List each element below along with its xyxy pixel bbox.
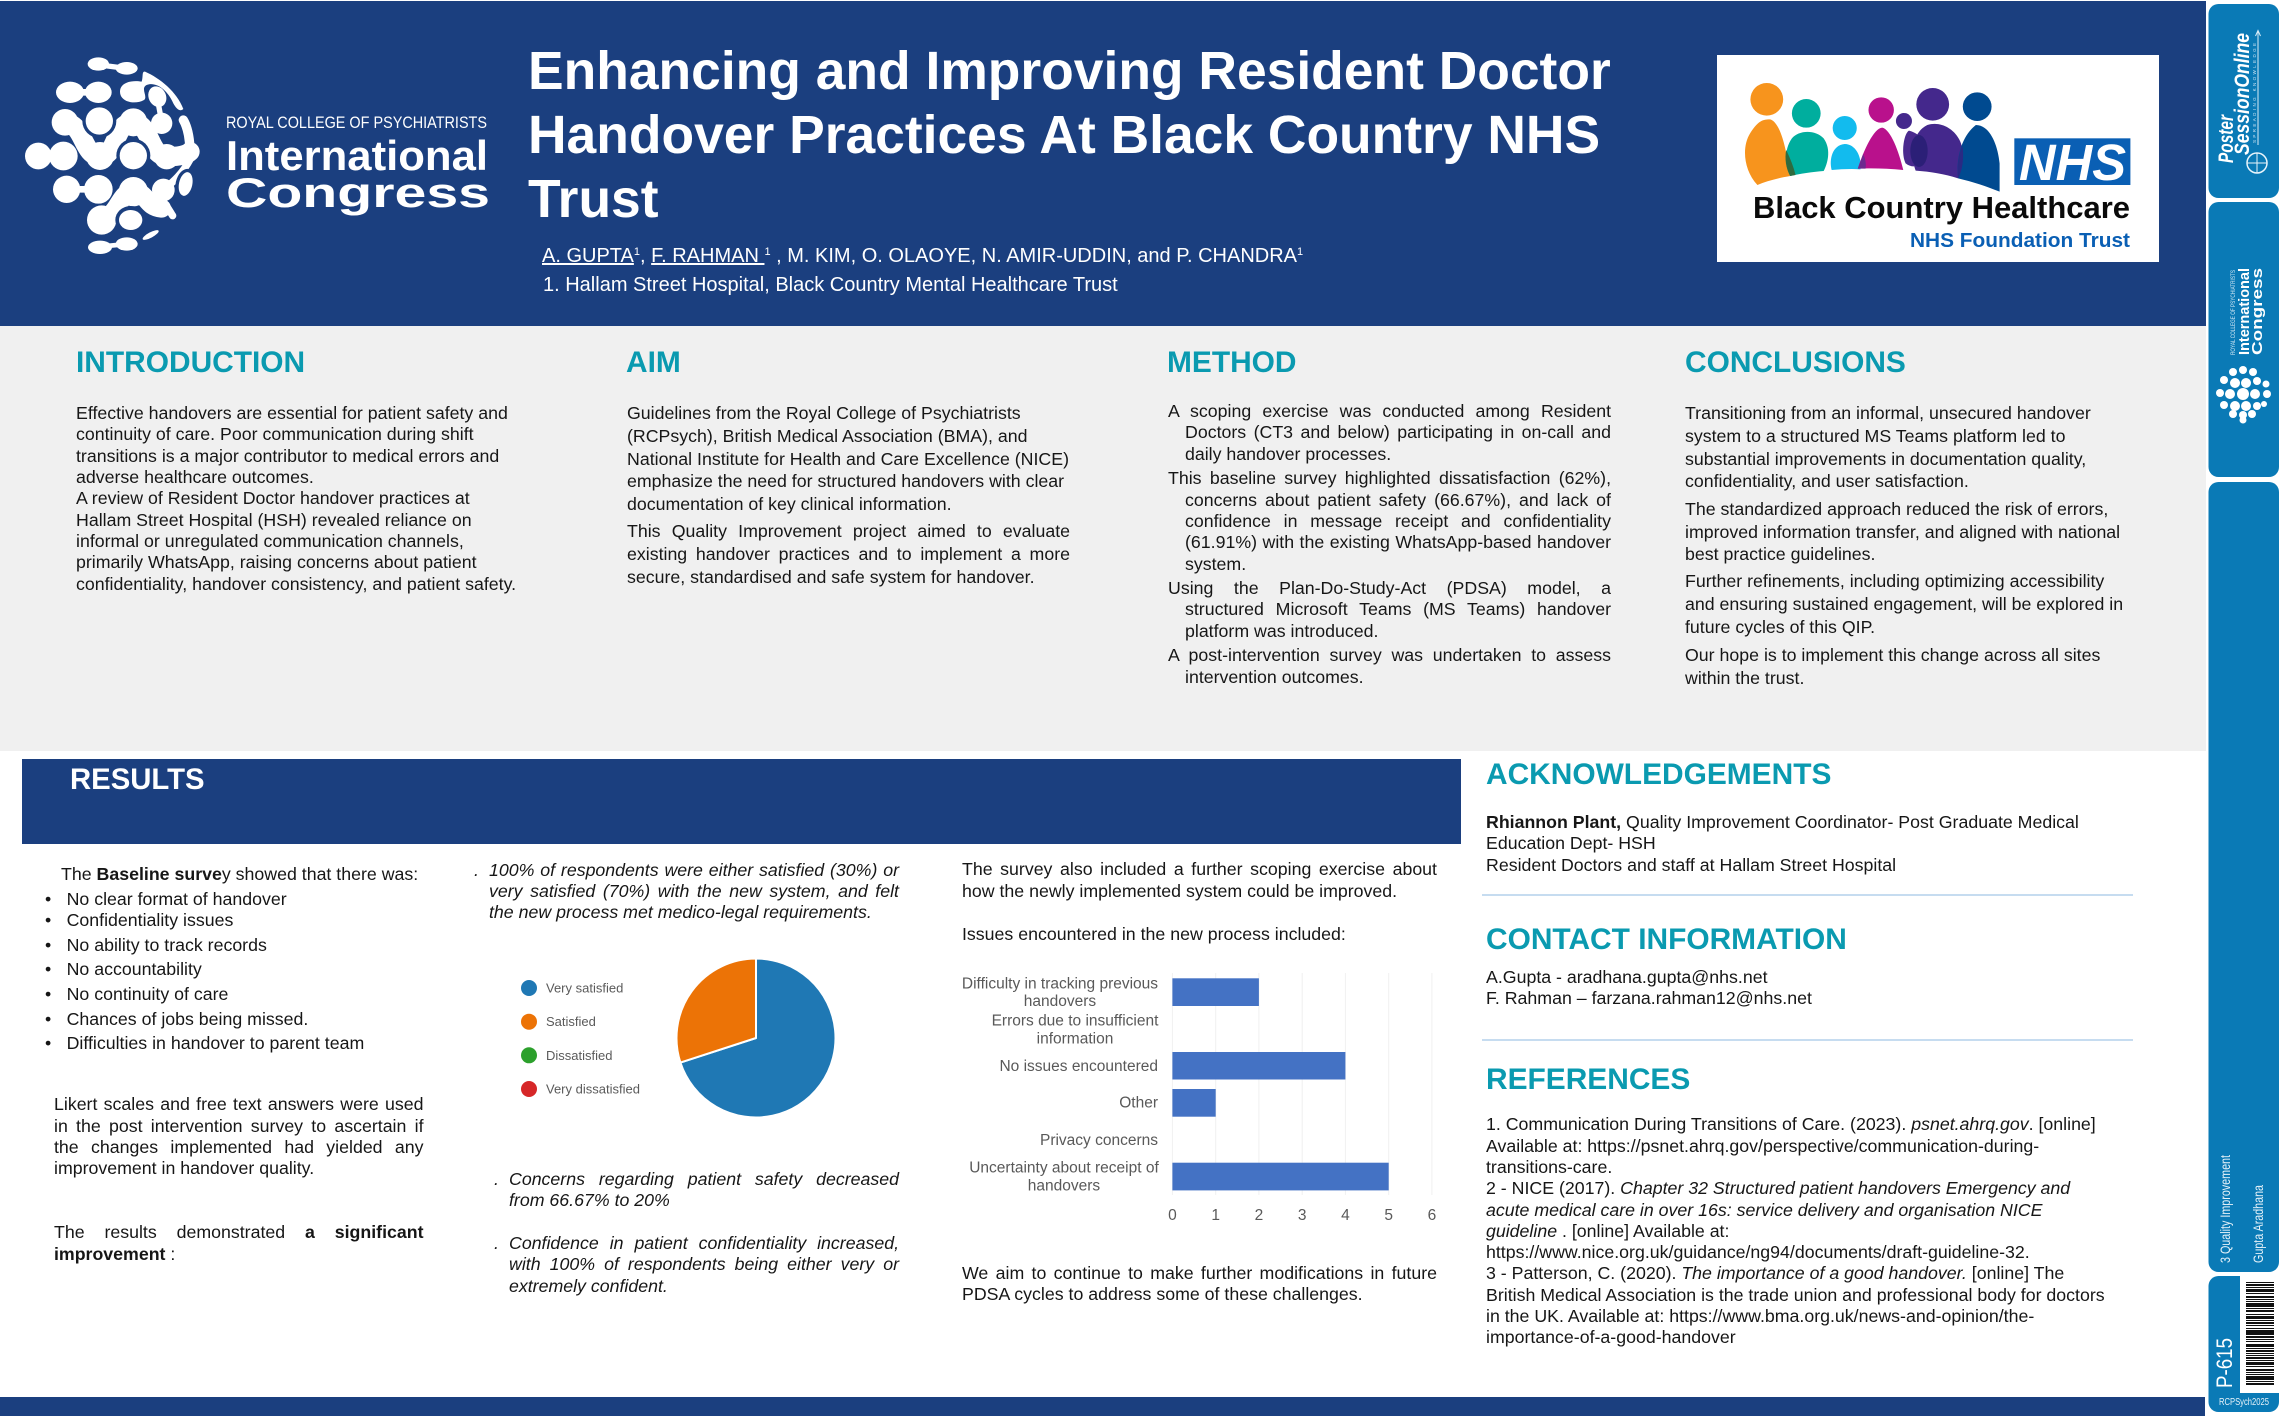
text: introduction: Hallam Street Hospital (HSH) revealed reliance on	[76, 510, 472, 530]
text: future cycles	[962, 1263, 1437, 1304]
poster title: Trust	[528, 170, 659, 228]
heading: results: RESULTS	[70, 763, 205, 796]
pie chart: satisfaction	[521, 960, 834, 1116]
text: conclusions: improved information transfer, and aligned with national	[1685, 522, 2120, 542]
pie slices	[676, 958, 835, 1118]
text: conclusions: Our hope is to implement this change across all sites	[1685, 645, 2100, 665]
list: baseline survey findings: •	[45, 984, 51, 1004]
header banner	[0, 1, 2206, 326]
list: baseline survey findings: •	[45, 910, 51, 930]
heading: acknowledgements: ACKNOWLEDGEMENTS	[1486, 758, 1831, 790]
list: baseline survey findings: •	[45, 1009, 51, 1029]
text: method: This baseline survey highlighted dissatisfaction (62%),	[1168, 468, 1611, 488]
tab: poster number and barcode	[2208, 1276, 2279, 1412]
text: method: confidence in message receipt and confidentiality	[1185, 511, 1611, 531]
tab: poster number and barcode: RCPSych2025	[2219, 1397, 2269, 1408]
tab: poster session online: Poster	[2215, 114, 2238, 163]
text: references: 3 - Patterson, C. (2020). The importance of a good handover. [online] The	[1486, 1263, 2064, 1283]
axis ticks: 3	[1298, 1207, 1307, 1224]
text: patient safety finding: Concerns regarding patient safety decreased	[509, 1169, 899, 1189]
category labels: Privacy concerns	[1040, 1132, 1158, 1149]
text: aim: existing handover practices and to implement a more	[627, 544, 1070, 564]
results banner	[22, 759, 1461, 844]
list: baseline survey findings: •	[45, 935, 51, 955]
text: conclusions: future cycles of this QIP.	[1685, 617, 1875, 637]
text: introduction	[76, 403, 516, 594]
pie legend: Very satisfied	[546, 980, 623, 996]
category labels: handovers	[1024, 993, 1096, 1010]
text: patient safety finding	[494, 1169, 900, 1210]
tab: international congress: International	[2236, 268, 2253, 355]
text: conclusions: The standardized approach reduced the risk of errors,	[1685, 499, 2108, 519]
heading: references: REFERENCES	[1486, 1063, 1690, 1096]
pie legend: Satisfied	[546, 1014, 596, 1029]
text: future cycles: We aim to continue to make further modifications in future	[962, 1263, 1437, 1283]
text: likert method: the changes implemented had yielded any	[54, 1137, 424, 1157]
text: contact information	[1486, 967, 1812, 1008]
category labels: Uncertainty about receipt of	[969, 1160, 1159, 1177]
text: introduction: Effective handovers are essential for patient safety and	[76, 403, 508, 423]
text: significant improvement	[54, 1222, 424, 1264]
axis ticks	[1168, 1207, 1436, 1224]
list: baseline survey findings	[45, 889, 364, 1053]
tab: poster session online: SPREADING KNOWLEDGE	[2252, 43, 2257, 143]
category labels	[962, 975, 1159, 1195]
text: confidentiality finding: with 100% of respondents being either very or	[509, 1254, 899, 1274]
list: baseline survey findings: Confidentiality issues	[67, 910, 233, 930]
text: satisfaction finding: the new process met medico-legal requirements.	[489, 902, 872, 922]
list: baseline survey findings: No accountability	[67, 959, 202, 979]
text: likert method	[54, 1094, 424, 1178]
text: introduction: primarily WhatsApp, raising concerns about patient	[76, 552, 477, 572]
category labels: Difficulty in tracking previous	[962, 975, 1158, 992]
list: baseline survey findings: Difficulties in handover to parent team	[67, 1033, 364, 1053]
text: references: 1. Communication During Transitions of Care. (2023). psnet.ahrq.gov. [online]	[1486, 1114, 2096, 1134]
heading: introduction: INTRODUCTION	[76, 346, 305, 379]
text: satisfaction finding	[474, 860, 900, 922]
text: conclusions: and ensuring sustained engagement, will be explored in	[1685, 594, 2123, 614]
axis ticks: 2	[1255, 1207, 1263, 1224]
poster title: Enhancing and Improving Resident Doctor	[528, 42, 1611, 100]
text: aim: Guidelines from the Royal College of Psychiatrists	[627, 403, 1021, 423]
text: aim: documentation of key clinical information.	[627, 494, 952, 514]
bar chart: issues encountered	[962, 973, 1436, 1224]
text: confidentiality finding: .	[494, 1233, 499, 1253]
text: aim: National Institute for Health and Care Excellence (NICE)	[627, 449, 1069, 469]
text: conclusions: best practice guidelines.	[1685, 544, 1875, 564]
text: method: A scoping exercise was conducted among Resident	[1168, 401, 1611, 421]
text: likert method: in the post intervention survey to ascertain if	[54, 1116, 424, 1136]
text: patient safety finding: .	[494, 1169, 499, 1189]
category labels: No issues encountered	[999, 1058, 1158, 1075]
text: aim: secure, standardised and safe system for handover.	[627, 567, 1034, 587]
text: acknowledgements: Education Dept- HSH	[1486, 833, 1656, 853]
text: further scoping: The survey also included a further scoping exercise about	[962, 859, 1437, 879]
list: baseline survey findings: No ability to track records	[67, 935, 267, 955]
text: confidentiality finding: extremely confident.	[509, 1276, 668, 1296]
text: introduction: continuity of care. Poor communication during shift	[76, 424, 474, 444]
tab: category and author: 3 Quality Improvement	[2218, 1155, 2233, 1263]
text: method	[1168, 401, 1611, 687]
text: references: importance-of-a-good-handover	[1486, 1327, 1736, 1347]
text: method: intervention outcomes.	[1185, 667, 1364, 687]
text: acknowledgements	[1486, 812, 2079, 875]
text: confidentiality finding	[494, 1233, 900, 1296]
logo: Black Country Healthcare NHS Foundation Trust	[1717, 55, 2159, 262]
text: method: platform was introduced.	[1185, 621, 1378, 641]
text: conclusions: system to a structured MS Teams platform led to	[1685, 426, 2065, 446]
logo: RCPsych International Congress: International	[226, 132, 488, 179]
text: acknowledgements: Rhiannon Plant, Quality Improvement Coordinator- Post Graduate Medical	[1486, 812, 2079, 832]
text: further scoping: how the newly implemented system could be improved.	[962, 881, 1397, 901]
text: aim	[627, 403, 1070, 587]
sidebar tabs	[2208, 4, 2279, 1412]
axis ticks: 4	[1341, 1207, 1350, 1224]
text: contact information: A.Gupta - aradhana.gupta@nhs.net	[1486, 967, 1768, 987]
text: conclusions: within the trust.	[1685, 668, 1804, 688]
text: introduction: transitions is a major contributor to medical errors and	[76, 446, 499, 466]
poster title: Handover Practices At Black Country NHS	[528, 106, 1600, 164]
list: baseline survey findings: No continuity of care	[67, 984, 228, 1004]
text: method: A post-intervention survey was undertaken to assess	[1168, 645, 1611, 665]
text: acknowledgements: Resident Doctors and staff at Hallam Street Hospital	[1486, 855, 1896, 875]
axis ticks: 5	[1384, 1207, 1393, 1224]
text: significant improvement: The results demonstrated a significant	[54, 1222, 424, 1242]
text: method: structured Microsoft Teams (MS Teams) handover	[1185, 599, 1611, 619]
text: issues heading: Issues encountered in the new process included:	[962, 924, 1346, 944]
text: satisfaction finding: .	[474, 860, 479, 880]
logo: RCPsych International Congress: Congress	[226, 169, 490, 216]
pie legend: Very dissatisfied	[546, 1082, 640, 1096]
heading: method: METHOD	[1167, 346, 1297, 378]
affiliation: 1. Hallam Street Hospital, Black Country Mental Healthcare Trust	[543, 274, 1118, 296]
text: introduction: informal or unregulated communication channels,	[76, 531, 464, 551]
text: references	[1486, 1114, 2105, 1347]
text: references: in the UK. Available at: https://www.bma.org.uk/news-and-opinion/the-	[1486, 1306, 2034, 1326]
bars	[1172, 978, 1389, 1190]
axis ticks: 0	[1168, 1207, 1177, 1224]
text: satisfaction finding: 100% of respondents were either satisfied (30%) or	[489, 860, 899, 880]
text: method: Using the Plan-Do-Study-Act (PDSA) model, a	[1168, 578, 1611, 598]
text: introduction: confidentiality, handover consistency, and patient safety.	[76, 574, 516, 594]
grey summary panel	[0, 326, 2206, 751]
pie legend	[521, 980, 640, 1097]
list: baseline survey findings: •	[45, 1033, 51, 1053]
text: references: transitions-care.	[1486, 1157, 1612, 1177]
text: references: Available at: https://psnet.ahrq.gov/perspective/communication-during-	[1486, 1136, 2039, 1156]
list: baseline survey findings: •	[45, 889, 51, 909]
list: baseline survey findings: No clear format of handover	[67, 889, 287, 909]
category labels: Other	[1119, 1095, 1158, 1112]
tab: international congress: ROYAL COLLEGE OF PSYCHIATRISTS	[2231, 270, 2237, 355]
text: introduction: adverse healthcare outcomes.	[76, 467, 314, 487]
list: baseline survey findings: •	[45, 959, 51, 979]
text: method: Doctors (CT3 and below) participating in on-call and	[1185, 422, 1611, 442]
tab: poster session online	[2208, 4, 2279, 198]
list: baseline survey findings: Chances of jobs being missed.	[67, 1009, 308, 1029]
heading: contact information: CONTACT INFORMATION	[1486, 922, 1847, 956]
pie legend: Dissatisfied	[546, 1048, 612, 1063]
text: references: https://www.nice.org.uk/guidance/ng94/documents/draft-guideline-32.	[1486, 1242, 2030, 1262]
text: conclusions: confidentiality, and user satisfaction.	[1685, 471, 1969, 491]
tab: international congress: Congress	[2249, 268, 2266, 355]
text: method: daily handover processes.	[1185, 444, 1391, 464]
text: introduction: A review of Resident Doctor handover practices at	[76, 488, 470, 508]
axis ticks: 6	[1428, 1207, 1436, 1224]
text: conclusions: Transitioning from an informal, unsecured handover	[1685, 403, 2091, 423]
logo: Black Country Healthcare NHS Foundation Trust: Black Country Healthcare	[1753, 190, 2130, 225]
logo sphere	[25, 57, 199, 254]
tab: poster number and barcode: P-615	[2212, 1338, 2237, 1388]
text: likert method: improvement in handover quality.	[54, 1158, 314, 1178]
category labels: Errors due to insufficient	[992, 1012, 1159, 1029]
axis ticks: 1	[1211, 1207, 1220, 1224]
text: conclusions	[1685, 403, 2123, 688]
text: conclusions: substantial improvements in documentation quality,	[1685, 449, 2086, 469]
text: method: system.	[1185, 554, 1246, 574]
logo: Black Country Healthcare NHS Foundation Trust: NHS Foundation Trust	[1910, 230, 2130, 252]
text: confidentiality finding: Confidence in patient confidentiality increased,	[509, 1233, 899, 1253]
text: method: concerns about patient safety (66.67%), and lack of	[1185, 490, 1611, 510]
text: references: guideline . [online] Available at:	[1486, 1221, 1729, 1241]
tab: poster session online: SessionOnline	[2231, 33, 2254, 155]
text: references: 2 - NICE (2017). Chapter 32 Structured patient handovers Emergency and	[1486, 1178, 2070, 1198]
text: further scoping	[962, 859, 1437, 901]
logo: RCPsych International Congress	[25, 57, 490, 254]
heading: aim: AIM	[626, 346, 681, 378]
text: contact information: F. Rahman – farzana.rahman12@nhs.net	[1486, 988, 1812, 1008]
tab: category and author: Gupta Aradhana	[2251, 1185, 2266, 1263]
text: references: acute medical care in over 16s: service delivery and organisation NICE	[1486, 1200, 2042, 1220]
text: future cycles: PDSA cycles to address some of these challenges.	[962, 1284, 1363, 1304]
text: aim: emphasize the need for structured handovers with clear	[627, 471, 1064, 491]
text: satisfaction finding: very satisfied (70%) with the new system, and felt	[489, 881, 899, 901]
heading: conclusions: CONCLUSIONS	[1685, 346, 1906, 378]
authors: A. GUPTA1, F. RAHMAN 1 , M. KIM, O. OLAOYE, N. AMIR-UDDIN, and P. CHANDRA1	[542, 245, 1303, 267]
logo: Black Country Healthcare NHS Foundation Trust: NHS	[2019, 134, 2126, 191]
text: significant improvement: improvement :	[54, 1244, 175, 1264]
category labels: handovers	[1028, 1178, 1100, 1195]
text: patient safety finding: from 66.67% to 20%	[509, 1190, 670, 1210]
category labels: information	[1037, 1030, 1113, 1047]
tab: international congress	[2208, 202, 2279, 477]
text: likert method: Likert scales and free text answers were used	[54, 1094, 424, 1114]
text: aim: (RCPsych), British Medical Association (BMA), and	[627, 426, 1027, 446]
text: references: British Medical Association is the trade union and professional body for doctors	[1486, 1285, 2105, 1305]
tab: category and author	[2208, 482, 2279, 1272]
poster title	[528, 42, 1611, 228]
bottom bar	[0, 1397, 2205, 1416]
text: aim: This Quality Improvement project aimed to evaluate	[627, 521, 1070, 541]
text: baseline survey intro: The Baseline survey showed that there was:	[61, 864, 418, 884]
text: method: (61.91%) with the existing WhatsApp-based handover	[1185, 532, 1611, 552]
text: conclusions: Further refinements, including optimizing accessibility	[1685, 571, 2104, 591]
